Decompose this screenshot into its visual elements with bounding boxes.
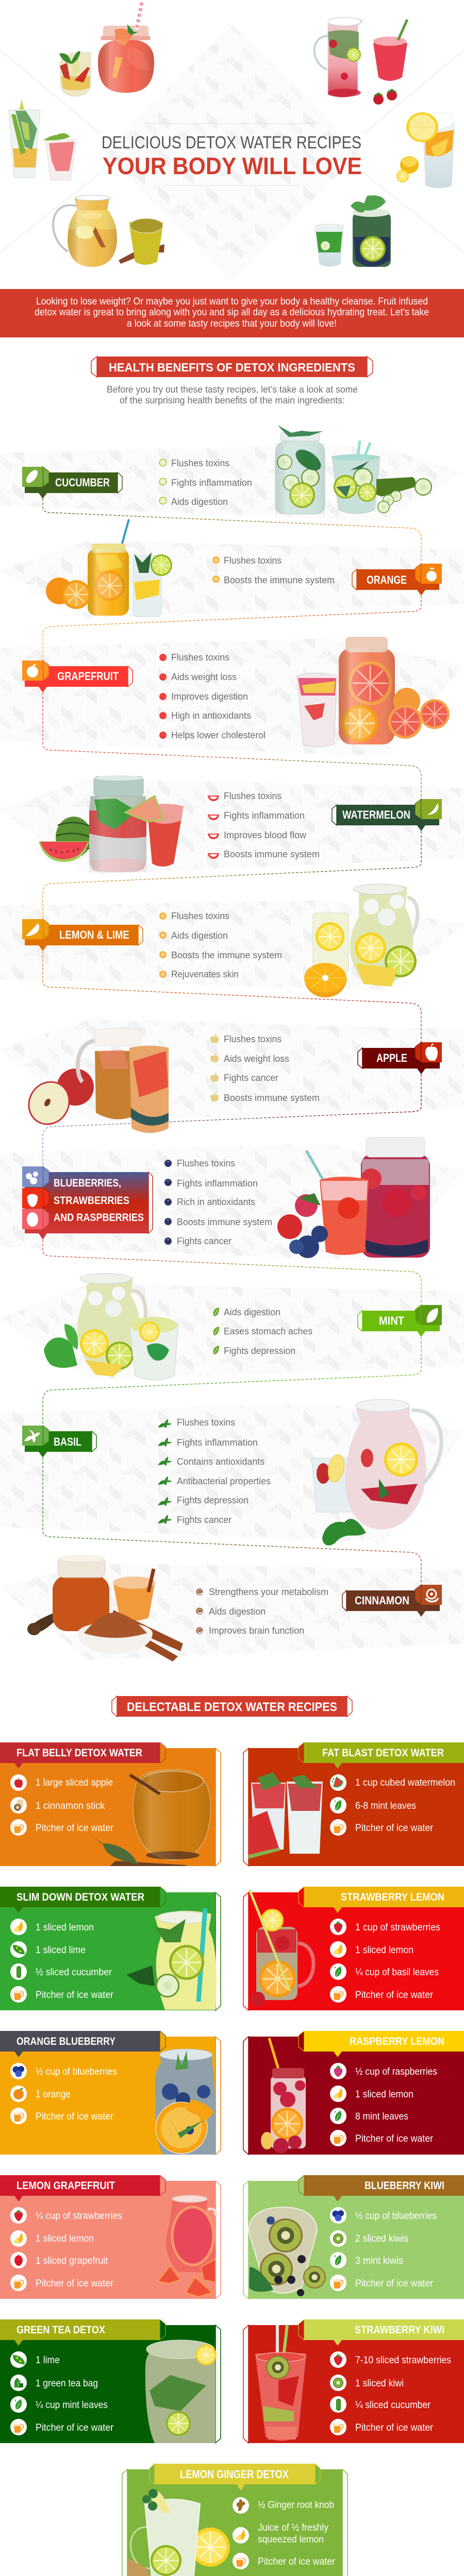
list: grapefruit benefits <box>159 652 266 740</box>
list: mint benefits: Aids digestion <box>224 1307 280 1317</box>
recipe card: slim down detox water <box>0 1887 221 2010</box>
hero image: cucumber glass and watermelon glass <box>9 99 76 180</box>
title <box>102 124 362 185</box>
label: orange: ORANGE <box>367 573 407 586</box>
recipe card: flat belly detox water: FLAT BELLY DETOX WATER <box>16 1747 142 1759</box>
heading: delectable recipes <box>112 1696 352 1717</box>
recipe card: green tea detox: Pitcher of ice water <box>36 2422 113 2433</box>
list: grapefruit benefits: High in antioxidants <box>171 710 251 721</box>
label: apple <box>358 1042 442 1074</box>
recipe card: raspberry lemon: ½ cup of raspberries <box>355 2066 437 2077</box>
list: basil benefits: Antibacterial properties <box>177 1476 271 1486</box>
recipe card: slim down detox water: 1 sliced lemon <box>36 1922 94 1933</box>
recipe card: lemon ginger detox: Pitcher of ice water <box>258 2556 335 2567</box>
recipe card: flat belly detox water: 1 large sliced apple <box>36 1777 113 1788</box>
label: basil: BASIL <box>54 1435 81 1448</box>
label: watermelon: WATERMELON <box>342 808 410 821</box>
list: cucumber benefits: Flushes toxins <box>171 457 229 468</box>
list: watermelon benefits: Flushes toxins <box>224 790 281 801</box>
list: basil benefits: Contains antioxidants <box>177 1456 264 1467</box>
recipe card: lemon ginger detox: ½ Ginger root knob <box>258 2499 334 2511</box>
hero image: strawberry glass and grapefruit jar <box>59 3 154 96</box>
recipe card: green tea detox: ¼ cup mint leaves <box>36 2399 108 2411</box>
list: watermelon benefits: Boosts immune system <box>224 849 320 859</box>
recipe card: lemon ginger detox <box>122 2464 347 2576</box>
label: cinnamon <box>342 1585 442 1617</box>
recipe card: lemon ginger detox: LEMON GINGER DETOX <box>180 2468 289 2481</box>
list: apple benefits: Flushes toxins <box>224 1033 281 1044</box>
list: berry benefits: Fights cancer <box>177 1235 231 1246</box>
label: cucumber: CUCUMBER <box>55 476 110 489</box>
recipe card: green tea detox: GREEN TEA DETOX <box>16 2324 105 2336</box>
list: apple benefits: Fights cancer <box>224 1072 278 1083</box>
list: cucumber benefits <box>160 457 252 507</box>
health benefits intro text: of the surprising health benefits of the main ingredients: <box>120 395 345 405</box>
image: mint drinks <box>44 1274 178 1380</box>
recipe card: blueberry kiwi: Pitcher of ice water <box>355 2278 433 2289</box>
image: cinnamon and honey <box>27 1554 183 1662</box>
recipe card: lemon grapefruit: 1 sliced lemon <box>36 2233 94 2244</box>
list: lemon and lime benefits: Aids digestion <box>171 930 228 941</box>
recipe card: strawberry lemon: 1 cup of strawberries <box>355 1922 440 1933</box>
intro band: Looking to lose weight? Or maybe you just want to give your body a healthy cleanse. Fruit infused <box>36 296 428 307</box>
recipe card: raspberry lemon: 1 sliced lemon <box>355 2089 413 2100</box>
hero background <box>0 25 464 280</box>
label: apple: APPLE <box>376 1052 407 1064</box>
list: berry benefits: Flushes toxins <box>177 1158 235 1168</box>
intro band <box>0 289 464 337</box>
recipe card: raspberry lemon <box>243 2031 464 2155</box>
recipe card: blueberry kiwi: 2 sliced kiwis <box>355 2233 408 2244</box>
recipe card: fat blast detox water: Pitcher of ice water <box>355 1822 433 1834</box>
recipe card: strawberry kiwi: 7-10 sliced strawberries <box>355 2354 451 2366</box>
recipe card: raspberry lemon: 8 mint leaves <box>355 2111 408 2122</box>
recipe card: flat belly detox water <box>0 1742 221 1866</box>
recipe card: strawberry kiwi: 1 sliced kiwi <box>355 2378 404 2389</box>
hero image: cucumber glass and blueberry jar <box>315 195 391 267</box>
recipe card: lemon ginger detox: squeezed lemon <box>258 2534 324 2545</box>
list: mint benefits: Eases stomach aches <box>224 1326 312 1336</box>
list: watermelon benefits: Fights inflammation <box>224 810 305 821</box>
recipe card: lemon grapefruit: ¼ cup of strawberries <box>36 2210 122 2222</box>
recipe card: strawberry kiwi: STRAWBERRY KIWI <box>355 2324 444 2336</box>
intro band: a look at some tasty recipes that your body will love! <box>127 318 337 329</box>
list: cucumber benefits: Aids digestion <box>171 496 228 507</box>
heading: health benefits <box>91 357 373 377</box>
title: YOUR BODY WILL LOVE <box>103 152 362 179</box>
recipe card: orange blueberry: Pitcher of ice water <box>36 2111 113 2122</box>
recipe card: orange blueberry <box>0 2031 221 2155</box>
recipe card: green tea detox <box>0 2319 221 2443</box>
heading: health benefits: HEALTH BENEFITS OF DETOX INGREDIENTS <box>109 361 355 374</box>
list: lemon and lime benefits <box>159 910 282 979</box>
recipe card: slim down detox water: SLIM DOWN DETOX WATER <box>16 1891 144 1903</box>
list: cucumber benefits: Fights inflammation <box>171 477 252 488</box>
list: apple benefits <box>210 1033 320 1103</box>
recipe card: green tea detox: 1 green tea bag <box>36 2378 98 2389</box>
image: apple drinks <box>21 1028 169 1133</box>
list: apple benefits: Aids weight loss <box>224 1053 289 1064</box>
recipe card: blueberry kiwi: ½ cup of blueberries <box>355 2210 437 2222</box>
list: basil benefits: Fights inflammation <box>177 1437 258 1448</box>
list: apple benefits: Boosts immune system <box>224 1092 320 1103</box>
label: mint: MINT <box>379 1314 405 1327</box>
label: cinnamon: CINNAMON <box>355 1594 409 1607</box>
list: cinnamon benefits <box>196 1586 328 1636</box>
label: grapefruit: GRAPEFRUIT <box>57 670 119 683</box>
recipe card: lemon grapefruit <box>0 2175 221 2299</box>
recipe card: fat blast detox water <box>243 1742 464 1866</box>
patterned background bands <box>0 444 464 1660</box>
image: basil drinks <box>311 1399 441 1546</box>
label: blueberries, strawberries and raspberries: AND RASPBERRIES <box>54 1212 144 1224</box>
health benefits intro text <box>107 384 358 405</box>
image: cucumber drinks <box>275 425 432 514</box>
recipe card: strawberry kiwi: ¼ sliced cucumber <box>355 2399 430 2411</box>
recipe card: slim down detox water: Pitcher of ice water <box>36 1989 113 2001</box>
list: basil benefits: Flushes toxins <box>177 1417 235 1428</box>
recipe card: raspberry lemon: RASPBERRY LEMON <box>350 2036 444 2047</box>
recipe card: strawberry lemon: STRAWBERRY LEMON <box>341 1891 444 1903</box>
list: lemon and lime benefits: Rejuvenates skin <box>171 969 239 979</box>
label: blueberries, strawberries and raspberries: BLUEBERRIES, <box>54 1177 121 1189</box>
list: lemon and lime benefits: Boosts the immune system <box>171 950 282 960</box>
intro band: detox water is great to bring along with you and sip all day as a delicious hydrating treat. Let’s take <box>35 307 429 318</box>
recipe card: raspberry lemon: Pitcher of ice water <box>355 2133 433 2144</box>
health benefits intro text: Before you try out these tasty recipes, let’s take a look at some <box>107 384 358 395</box>
list: orange benefits: Flushes toxins <box>224 555 281 566</box>
list: grapefruit benefits: Flushes toxins <box>171 652 229 663</box>
recipe card: flat belly detox water: 1 cinnamon stick <box>36 1800 105 1811</box>
list: cinnamon benefits: Strengthens your metabolism <box>209 1586 328 1597</box>
recipe card: lemon grapefruit: Pitcher of ice water <box>36 2278 113 2289</box>
image: watermelon drinks <box>39 775 184 872</box>
recipe card: strawberry kiwi: Pitcher of ice water <box>355 2422 433 2433</box>
list: mint benefits <box>213 1307 312 1356</box>
recipe card: strawberry kiwi <box>243 2319 464 2443</box>
hero image: lemon glass <box>396 112 454 188</box>
list: berry benefits: Fights inflammation <box>177 1178 258 1189</box>
list: orange benefits <box>212 555 335 585</box>
recipe card: orange blueberry: ORANGE BLUEBERRY <box>16 2036 115 2047</box>
label: lemon and lime: LEMON & LIME <box>59 928 129 941</box>
recipe card: lemon ginger detox: Juice of ½ freshly <box>258 2522 328 2533</box>
image: orange drinks <box>46 519 172 617</box>
list: grapefruit benefits: Helps lower cholesterol <box>171 730 266 740</box>
label: cucumber <box>22 467 122 499</box>
label: blueberries, strawberries and raspberries <box>22 1166 153 1240</box>
title: DELICIOUS DETOX WATER RECIPES <box>102 133 361 152</box>
list: basil benefits: Fights depression <box>177 1495 248 1505</box>
image: grapefruit drinks <box>297 637 450 747</box>
recipe card: slim down detox water: 1 sliced lime <box>36 1944 86 1956</box>
label: watermelon <box>332 799 442 831</box>
label: basil <box>22 1426 96 1458</box>
recipe card: strawberry lemon: Pitcher of ice water <box>355 1989 433 2001</box>
recipe card: flat belly detox water: Pitcher of ice water <box>36 1822 113 1834</box>
recipe card: green tea detox: 1 lime <box>36 2354 60 2366</box>
recipe card: blueberry kiwi: BLUEBERRY KIWI <box>364 2180 444 2192</box>
recipe card: strawberry lemon <box>243 1887 464 2010</box>
label: lemon and lime <box>22 919 143 951</box>
recipe card: fat blast detox water: 1 cup cubed watermelon <box>355 1777 455 1788</box>
heading: delectable recipes: DELECTABLE DETOX WATER RECIPES <box>127 1700 337 1714</box>
recipe card: fat blast detox water: FAT BLAST DETOX WATER <box>322 1747 444 1759</box>
label: blueberries, strawberries and raspberries: STRAWBERRIES <box>54 1195 129 1207</box>
list: mint benefits: Fights depression <box>224 1345 295 1356</box>
recipe card: orange blueberry: 1 orange <box>36 2089 71 2100</box>
recipe card: strawberry lemon: 1 sliced lemon <box>355 1944 413 1956</box>
list: berry benefits: Rich in antioxidants <box>177 1196 255 1207</box>
list: berry benefits: Boosts immune system <box>177 1216 272 1227</box>
dashed connector path <box>43 498 421 1585</box>
list: lemon and lime benefits: Flushes toxins <box>171 910 229 921</box>
list: cinnamon benefits: Aids digestion <box>209 1606 266 1617</box>
list: watermelon benefits <box>208 790 320 859</box>
recipe card: blueberry kiwi <box>243 2175 464 2299</box>
list: watermelon benefits: Improves blood flow <box>224 829 307 840</box>
recipe card: orange blueberry: ½ cup of blueberries <box>36 2066 117 2077</box>
list: grapefruit benefits: Aids weight loss <box>171 671 237 682</box>
label: orange <box>352 564 442 596</box>
list: basil benefits: Fights cancer <box>177 1514 231 1525</box>
recipe card: fat blast detox water: 6-8 mint leaves <box>355 1800 416 1811</box>
hero image: berry pitcher and red glass <box>314 17 407 105</box>
list: berry benefits <box>164 1158 272 1246</box>
hero image: apple pitcher and amber glass <box>53 195 164 267</box>
list: grapefruit benefits: Improves digestion <box>171 691 248 702</box>
recipe card: lemon grapefruit: 1 sliced grapefruit <box>36 2255 108 2266</box>
label: grapefruit <box>22 660 132 692</box>
image: lemon and lime drinks <box>304 884 418 997</box>
recipe card: lemon grapefruit: LEMON GRAPEFRUIT <box>16 2180 115 2192</box>
image: berry drinks <box>277 1138 430 1258</box>
recipe card: slim down detox water: ½ sliced cucumber <box>36 1967 112 1978</box>
list: basil benefits <box>158 1417 271 1525</box>
label: mint <box>358 1305 442 1337</box>
list: orange benefits: Boosts the immune system <box>224 574 335 585</box>
recipe card: blueberry kiwi: 3 mint kiwis <box>355 2255 403 2266</box>
recipe card: strawberry lemon: ¼ cup of basil leaves <box>355 1967 439 1978</box>
list: cinnamon benefits: Improves brain function <box>209 1625 304 1636</box>
